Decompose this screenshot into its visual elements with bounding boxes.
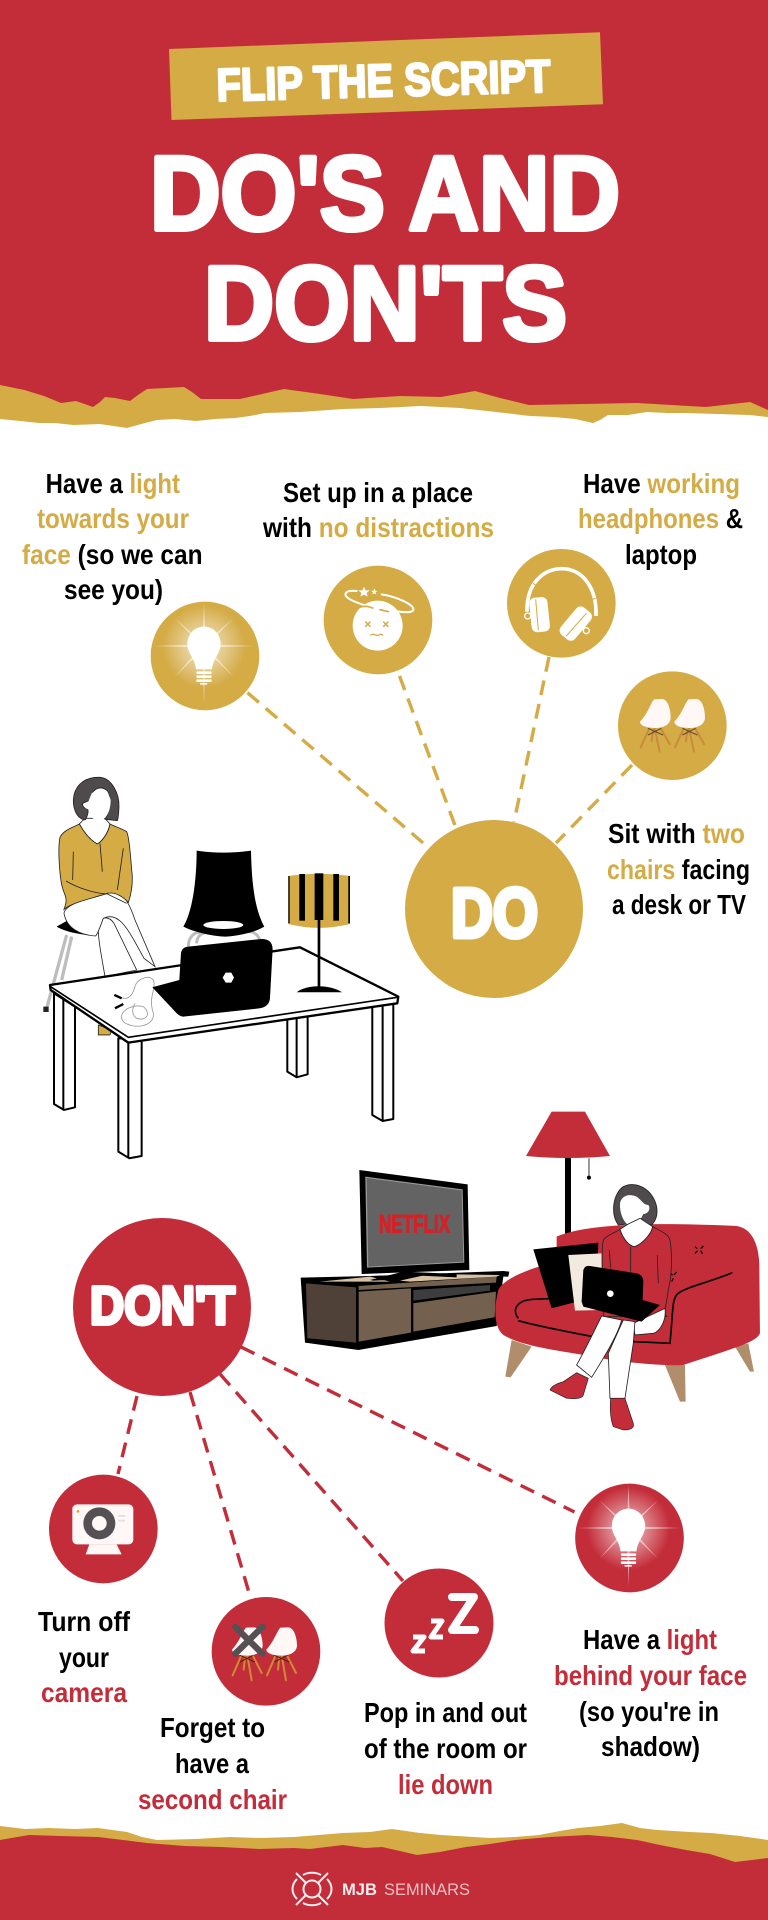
logo: MJB Seminars — [292, 1873, 470, 1905]
table — [50, 947, 398, 1158]
header band with torn edge — [0, 0, 768, 428]
dashed connectors: do — [248, 657, 632, 848]
title — [150, 136, 620, 362]
title: DON'TS — [204, 246, 567, 362]
title: DO'S AND — [150, 136, 620, 252]
text: no distractions — [262, 477, 494, 543]
text: light behind your face: (so you're in — [579, 1696, 719, 1727]
text: light behind your face: Have a light — [583, 1624, 717, 1655]
text: pop in and out: of the room or — [364, 1733, 527, 1764]
black laptop — [152, 939, 273, 1017]
television — [359, 1170, 469, 1283]
icon: camera — [49, 1475, 158, 1583]
text: working headphones — [578, 468, 743, 570]
logo mark — [292, 1873, 332, 1905]
text: no distractions: with no distractions — [262, 512, 494, 543]
television: NETFLIX — [379, 1210, 450, 1238]
laptop on lap — [582, 1266, 660, 1322]
boots — [550, 1373, 634, 1430]
dashed connectors: don't — [118, 1347, 574, 1596]
woman in gold top — [59, 777, 155, 1035]
illustration: woman on sofa with TV — [301, 1112, 760, 1430]
cushions — [533, 1243, 602, 1311]
banner: flip the script — [169, 32, 603, 120]
DON'T circle: DON'T — [90, 1276, 235, 1336]
text: light towards your face: face (so we can — [22, 539, 203, 570]
text: turn off camera: your — [59, 1642, 109, 1673]
text: pop in and out: lie down — [398, 1769, 493, 1800]
woman in red top — [577, 1185, 671, 1398]
text: light behind your face — [554, 1624, 747, 1762]
striped lamp — [288, 873, 350, 992]
text: second chair — [138, 1712, 287, 1815]
text: working headphones: headphones & — [578, 503, 743, 534]
logo: MJB Seminars: SEMINARS — [384, 1880, 470, 1899]
tv stand — [301, 1271, 509, 1350]
text: turn off camera: Turn off — [38, 1606, 131, 1637]
black chair — [183, 851, 264, 947]
red sofa — [495, 1224, 760, 1402]
text: turn off camera — [38, 1606, 131, 1708]
text: no distractions: Set up in a place — [283, 477, 473, 508]
icon: light bulb gold — [151, 602, 259, 710]
text: turn off camera: camera — [41, 1677, 127, 1708]
text: pop in and out — [364, 1697, 527, 1800]
text: light towards your face: see you) — [64, 574, 163, 605]
text: light towards your face: Have a light — [46, 468, 180, 499]
DO circle: DO — [451, 874, 538, 952]
icon: headphones — [507, 549, 616, 658]
text: second chair: second chair — [138, 1784, 287, 1815]
red floor lamp — [526, 1112, 610, 1235]
logo: MJB Seminars: MJB — [342, 1880, 377, 1899]
illustration: woman at desk — [43, 777, 398, 1158]
text: second chair: have a — [175, 1748, 249, 1779]
text: second chair: Forget to — [160, 1712, 265, 1743]
text: two chairs — [607, 818, 750, 920]
text: light towards your face: towards your — [37, 503, 189, 534]
text: pop in and out: Pop in and out — [364, 1697, 527, 1728]
icon: crossed out chair — [212, 1597, 320, 1706]
earbuds — [114, 977, 154, 1026]
icon: dizzy face — [324, 566, 432, 674]
chair behind woman — [43, 920, 97, 1012]
banner: flip the script: FLIP THE SCRIPT — [216, 50, 551, 111]
text: light towards your face — [22, 468, 203, 605]
icon: two chairs gold — [618, 671, 727, 780]
DO circle — [405, 820, 583, 998]
text: working headphones: laptop — [625, 539, 697, 570]
icon: light bulb red — [575, 1484, 684, 1592]
footer band with torn edge — [0, 1823, 768, 1920]
icon: sleeping zzz — [384, 1568, 494, 1678]
text: two chairs: Sit with two — [608, 818, 745, 849]
DON'T circle — [73, 1218, 251, 1396]
text: two chairs: chairs facing — [607, 854, 750, 885]
text: light behind your face: shadow) — [601, 1731, 700, 1762]
text: working headphones: Have working — [583, 468, 740, 499]
